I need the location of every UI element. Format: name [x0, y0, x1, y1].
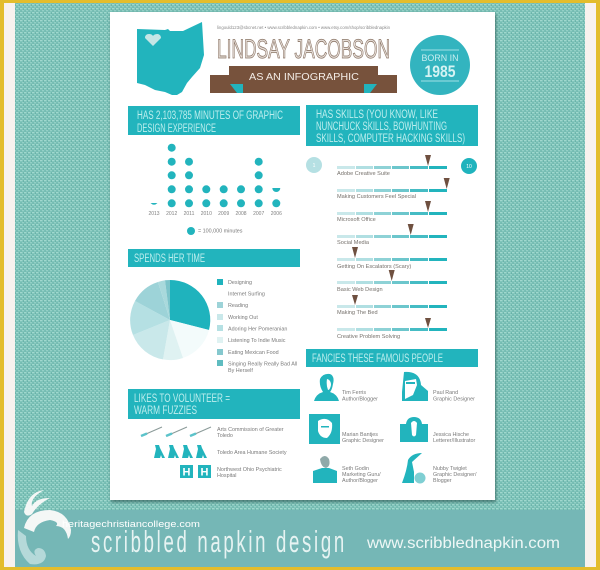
- year labels: [148, 211, 282, 217]
- paper shadow: [111, 14, 496, 502]
- legend: dot value: = 100,000 minutes: [198, 228, 243, 234]
- portrait: Paul Rand: [402, 372, 428, 401]
- panel: spends her time: [128, 249, 300, 374]
- heading bar: minutes: [128, 106, 300, 135]
- icons: hospital signs: H: [201, 466, 209, 478]
- icons: dogs: [154, 445, 207, 458]
- portrait: Nubby Twiglet: [402, 453, 426, 484]
- legend: dot value: [187, 227, 243, 235]
- panel: volunteer: [128, 389, 300, 479]
- ribbon banner: AS AN INFOGRAPHIC: [249, 71, 359, 83]
- label: humane society: Toledo Area Humane Society: [217, 450, 287, 456]
- skill: Basic Web Design: Basic Web Design: [337, 287, 383, 293]
- portrait: Marian Bantjes: [309, 414, 340, 444]
- heading bar: skills: NUNCHUCK SKILLS, BOWHUNTING: [316, 121, 447, 133]
- panel: volunteer: Toledo: [217, 433, 233, 439]
- heading bar: minutes: HAS 2,103,785 MINUTES OF GRAPHIC: [137, 110, 283, 122]
- skill: Getting On Escalators: Getting On Escalators (Scary): [337, 264, 411, 270]
- year labels: 2011: [184, 211, 195, 217]
- icon: Ohio map with heart: [137, 22, 204, 95]
- legend: activities: Reading: [228, 303, 248, 309]
- skill: Making Customers Feel Special: [337, 178, 450, 200]
- brand name: scribbled napkin design: [91, 525, 344, 559]
- scale: start 1: 1: [313, 163, 316, 169]
- legend: activities: Eating Mexican Food: [228, 350, 279, 356]
- heading bar: time: [128, 249, 300, 267]
- legend: activities: Designing: [228, 280, 252, 286]
- watermark: heritagechristiancollege.com: [62, 519, 200, 529]
- text: Seth Godin: Author/Blogger: [342, 478, 378, 484]
- icons: hospital signs: H: [183, 466, 191, 478]
- legend: activities: Adoring Her Pomeranian: [228, 326, 287, 332]
- website url: www.scribblednapkin.com: [366, 535, 560, 552]
- skill: Making The Bed: Making The Bed: [337, 310, 378, 316]
- text: Seth Godin: Seth Godin: [342, 466, 369, 472]
- text: Marian Bantjes: Marian Bantjes: [342, 432, 378, 438]
- year labels: 2012: [166, 211, 177, 217]
- legend: activities: Working Out: [228, 315, 258, 321]
- year labels: 2010: [201, 211, 212, 217]
- legend: activities: Singing Really Really Bad All: [228, 362, 297, 368]
- text: Nubby Twiglet: Blogger: [433, 478, 452, 484]
- footer branding: [18, 490, 560, 564]
- year labels: 2007: [253, 211, 264, 217]
- skill: Adobe Creative Suite: Adobe Creative Suite: [337, 171, 390, 177]
- skill: Making Customers Feel Special: Making Customers Feel Special: [337, 194, 416, 200]
- scale: start 1: [306, 157, 322, 173]
- ribbon banner: [210, 66, 397, 93]
- skill: Social Media: Social Media: [337, 240, 370, 246]
- panel: skills: [306, 105, 478, 340]
- heading bar: time: SPENDS HER TIME: [134, 253, 205, 265]
- skill: Microsoft Office: Microsoft Office: [337, 217, 376, 223]
- name title: LINDSAY JACOBSON: [217, 34, 390, 64]
- text: Paul Rand: Graphic Designer: [433, 396, 475, 402]
- heading bar: skills: [306, 105, 478, 146]
- icons: hospital signs: [180, 465, 211, 478]
- text: Seth Godin: Marketing Guru/: [342, 472, 381, 478]
- heading bar: volunteer: WARM FUZZIES: [134, 405, 197, 417]
- heading bar: volunteer: [128, 389, 300, 419]
- text: Tim Ferris: Tim Ferris: [342, 390, 366, 396]
- year labels: 2013: [148, 211, 160, 217]
- skill: Creative Problem Solving: Creative Problem Solving: [337, 334, 400, 340]
- text: Jessica Hische: Jessica Hische: [433, 432, 469, 438]
- heading bar: people: FANCIES THESE FAMOUS PEOPLE: [312, 353, 443, 365]
- skill: Making The Bed: [337, 295, 447, 316]
- chart: dots per year: [150, 144, 280, 207]
- skill: Social Media: [337, 224, 447, 246]
- portrait: Seth Godin: [313, 456, 337, 483]
- icon: flourish: [18, 490, 71, 564]
- pie chart: [130, 280, 210, 360]
- portrait: Tim Ferris: [314, 374, 339, 401]
- panel: graphic design experience: [128, 106, 300, 235]
- label: psychiatric hospital: Northwest Ohio Psychiatric: [217, 467, 282, 473]
- scale: end 10: [461, 158, 477, 174]
- legend: activities: By Herself: [228, 368, 253, 374]
- contact line: lingould123@sbcnet.net • www.scribblednapkin.com • www.etsy.com/shop/scribblednapkin: [217, 25, 391, 30]
- heading bar: people: [306, 349, 478, 367]
- year labels: 2006: [271, 211, 282, 217]
- legend: activities: Listening To Indie Music: [228, 338, 286, 344]
- header: [137, 22, 470, 95]
- badge: born in 1985: 1985: [424, 62, 456, 81]
- heading bar: minutes: DESIGN EXPERIENCE: [137, 123, 216, 135]
- badge: born in 1985: [410, 35, 470, 95]
- panel: famous people: [306, 349, 478, 484]
- year labels: 2008: [235, 211, 247, 217]
- paper sheet: [110, 12, 495, 500]
- text: Nubby Twiglet: Graphic Designer/: [433, 472, 477, 478]
- text: Tim Ferris: Author/Blogger: [342, 396, 378, 402]
- skill: Microsoft Office: [337, 201, 447, 223]
- scale: end 10: 10: [466, 164, 472, 170]
- year labels: 2009: [218, 211, 229, 217]
- panel: volunteer: Hospital: [217, 473, 236, 479]
- text: Jessica Hische: Letterer/Illustrator: [433, 438, 475, 444]
- portrait: Jessica Hische: [400, 417, 428, 442]
- legend: activities: [217, 279, 297, 374]
- heading bar: volunteer: LIKES TO VOLUNTEER =: [134, 393, 230, 405]
- badge: born in 1985: BORN IN: [422, 53, 459, 64]
- skill: Getting On Escalators: [337, 247, 447, 270]
- teal footer band: [15, 510, 585, 567]
- skill: Basic Web Design: [337, 270, 447, 293]
- heading bar: skills: HAS SKILLS (YOU KNOW, LIKE: [316, 109, 438, 121]
- legend: activities: Internet Surfing: [228, 292, 265, 298]
- label: arts commission: Arts Commission of Greater: [217, 427, 284, 433]
- text: Marian Bantjes: Graphic Designer: [342, 438, 384, 444]
- heading bar: skills: SKILLS, COMPUTER HACKING SKILLS): [316, 133, 465, 145]
- skill: Adobe Creative Suite: [337, 155, 447, 177]
- text: Paul Rand: Paul Rand: [433, 390, 458, 396]
- icons: paintbrushes: [141, 427, 211, 436]
- skill: Creative Problem Solving: [337, 318, 447, 340]
- text: Nubby Twiglet: Nubby Twiglet: [433, 466, 467, 472]
